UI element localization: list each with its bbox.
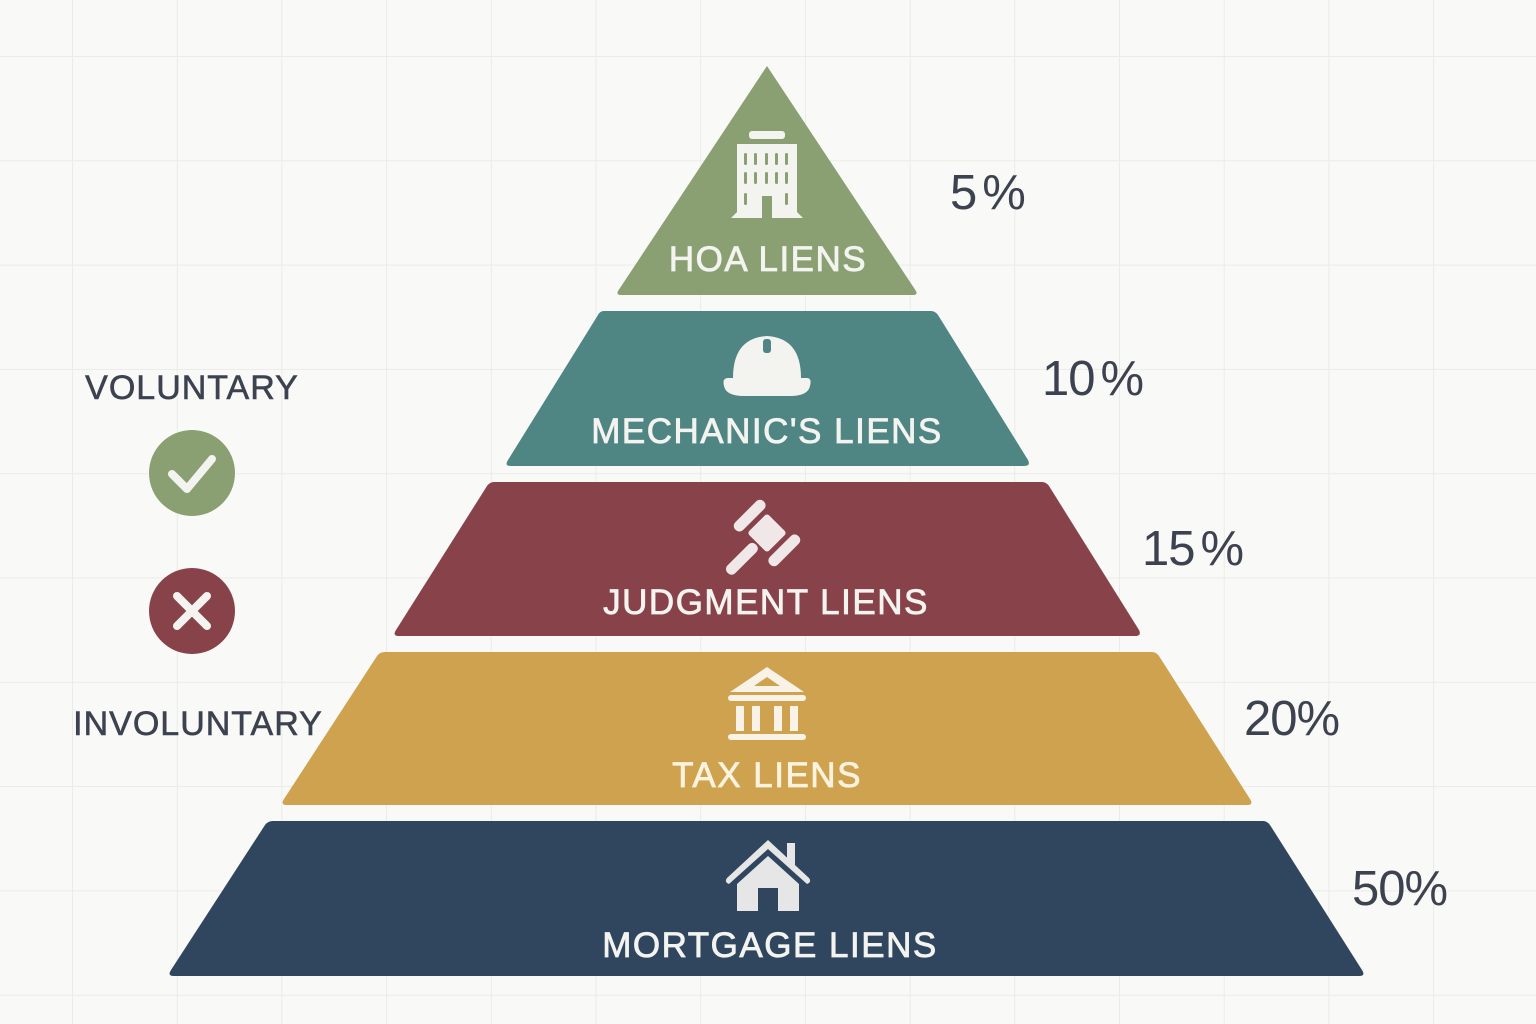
- label: tax liens: TAX LIENS: [672, 756, 862, 795]
- percent: 20%: 20%: [1244, 692, 1339, 746]
- icon: building: [731, 131, 803, 218]
- label: judgment liens: JUDGMENT LIENS: [603, 583, 929, 622]
- icon: check circle: [149, 430, 235, 516]
- percent: 5%: 5%: [950, 166, 1025, 220]
- tier: judgment liens: [395, 482, 1140, 636]
- label: mortgage liens: MORTGAGE LIENS: [602, 926, 938, 965]
- label: HOA liens: HOA LIENS: [669, 240, 867, 279]
- icon: gavel: [706, 498, 802, 594]
- legend label: involuntary: INVOLUNTARY: [73, 705, 323, 743]
- icon: x circle: [149, 568, 235, 654]
- percent: 10%: 10%: [1042, 352, 1143, 406]
- percent: 15%: 15%: [1142, 522, 1243, 576]
- icon: house: [726, 840, 810, 911]
- legend label: voluntary: VOLUNTARY: [85, 369, 299, 407]
- icon: hard hat: [724, 336, 811, 396]
- tier: tax liens: [283, 652, 1251, 805]
- percentages: [950, 166, 1447, 916]
- percent: 50%: 50%: [1352, 862, 1447, 916]
- legend: [73, 369, 323, 743]
- tier: mortgage liens: [170, 821, 1363, 976]
- tier: HOA liens: [617, 66, 917, 295]
- label: mechanic's liens: MECHANIC'S LIENS: [591, 412, 943, 451]
- tier: mechanic's liens: [507, 311, 1029, 466]
- icon: bank: [728, 667, 806, 740]
